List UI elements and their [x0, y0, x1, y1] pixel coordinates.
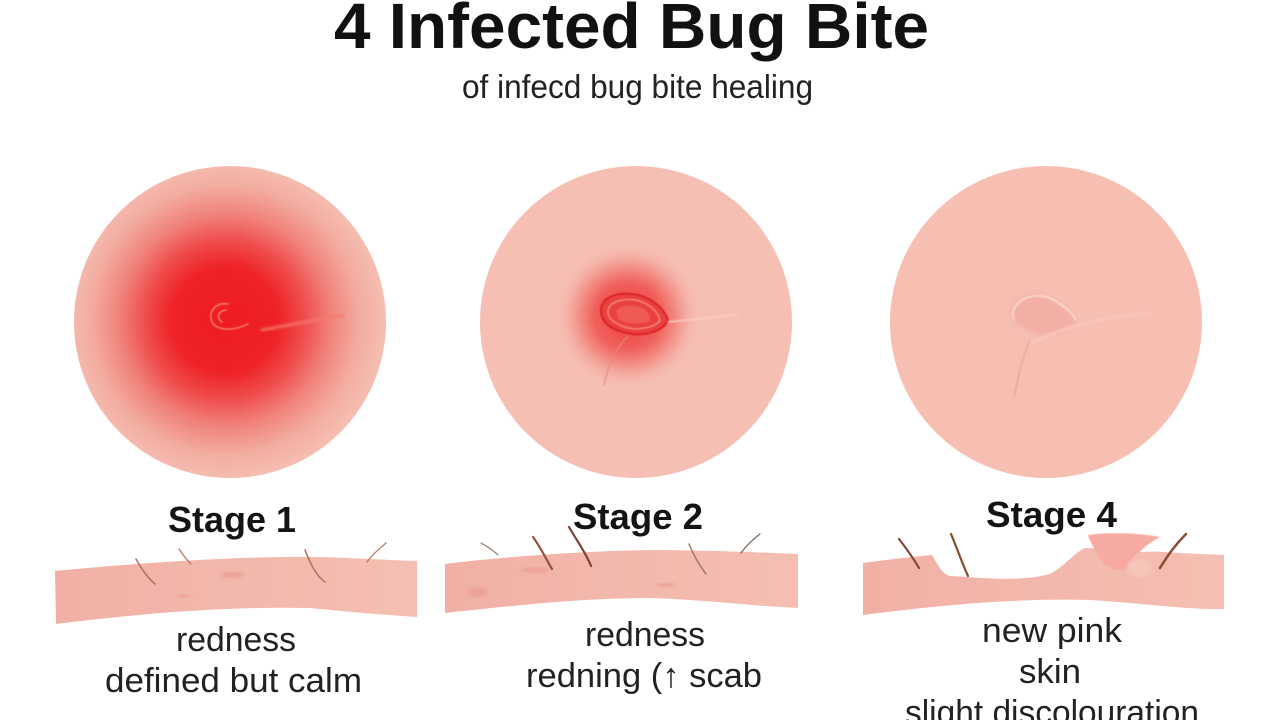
icon: stage 2 scab wound [601, 294, 738, 385]
panel: stage 2 skin circle [480, 166, 792, 478]
icon: stage 2 hairs [481, 527, 760, 574]
text: stage 1 description [105, 621, 362, 700]
icon: stage 1 hairs [136, 543, 386, 584]
text: stage 1 description: defined but calm [105, 662, 362, 700]
panel: stage 1 skin circle [74, 166, 386, 478]
panel: stage 2 skin cross-section [445, 527, 798, 613]
icon: stage 4 healed mark [1012, 294, 1152, 398]
text: stage 4 description [905, 612, 1199, 720]
text: stage 2 description: redning (↑ scab [526, 657, 762, 695]
icon: stage 4 scab flap [1088, 533, 1175, 577]
heading: stage 2: Stage 2 [573, 496, 703, 537]
text: stage 4 description: new pink [982, 612, 1123, 650]
icon: stage 1 bite mark [211, 304, 344, 330]
panel: stage 4 skin cross-section [863, 533, 1224, 615]
panel: stage 1 skin cross-section [55, 543, 417, 624]
heading: stage 1: Stage 1 [168, 499, 296, 540]
subtitle: of infecd bug bite healing [462, 68, 813, 105]
text: stage 2 description [526, 616, 762, 695]
heading: stage 4: Stage 4 [986, 494, 1117, 535]
icon: stage 4 hairs [899, 534, 1186, 576]
text: stage 2 description: redness [585, 616, 705, 654]
text: stage 1 description: redness [176, 621, 296, 659]
panel: stage 4 skin circle [890, 166, 1202, 478]
text: stage 4 description: skin [1019, 653, 1081, 691]
